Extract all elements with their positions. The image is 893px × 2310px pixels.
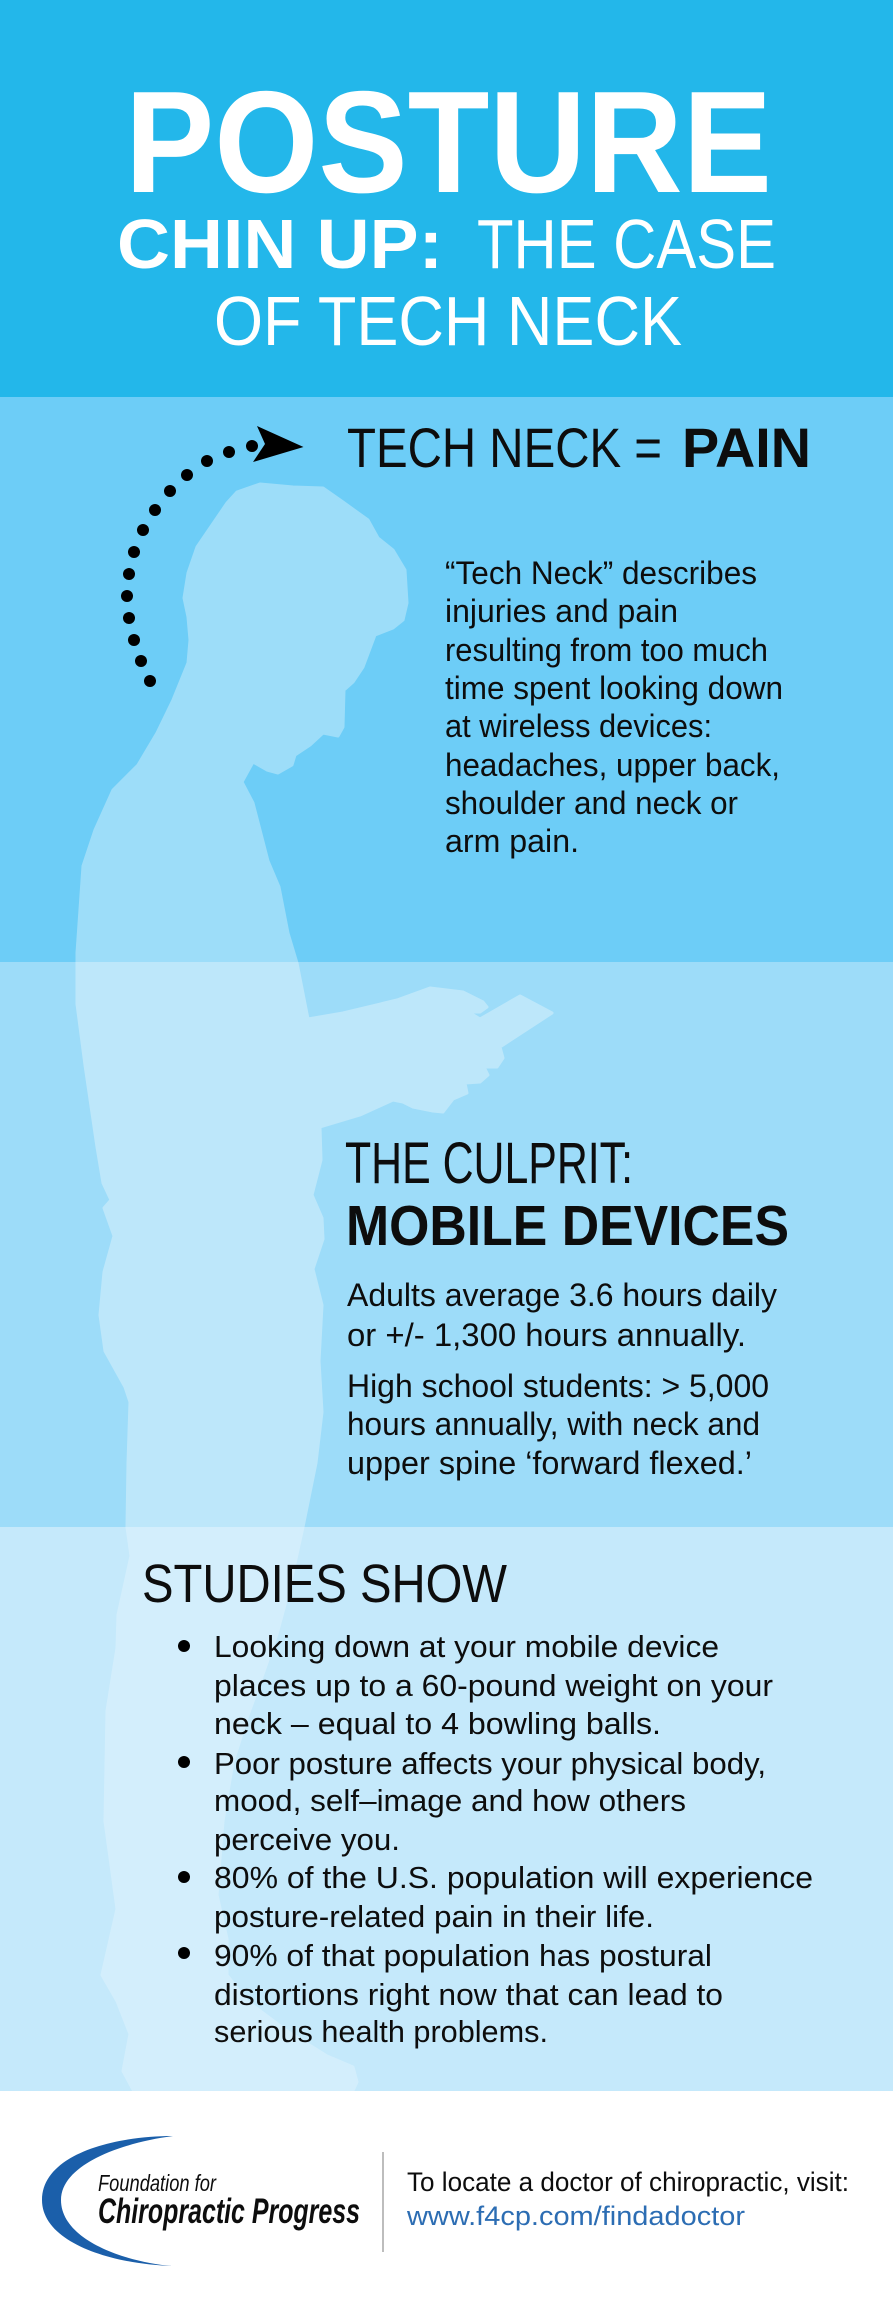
text block: tech neck description: at wireless devices: [445, 708, 712, 744]
logo: foundation for chiropractic progress: Foundation for [98, 2170, 217, 2196]
silhouette: person looking at phone [77, 484, 552, 2097]
text block: adult usage: or +/- 1,300 hours annually. [347, 1317, 746, 1353]
title: THE CASE [477, 205, 776, 283]
heading: tech neck = pain: PAIN [682, 416, 811, 479]
call to action: To locate a doctor of chiropractic, visit: [407, 2167, 849, 2197]
bullet 1: Looking down at your mobile device [214, 1629, 719, 1664]
list: study findings [178, 1629, 813, 2049]
bullet 1 [178, 1629, 773, 1741]
title [117, 61, 776, 360]
bullet 4: 90% of that population has postural [214, 1938, 712, 1973]
text block: tech neck description [445, 555, 783, 859]
title: OF TECH NECK [214, 282, 682, 360]
text block: tech neck description: headaches, upper back, [445, 747, 780, 783]
bullet 4 [178, 1938, 723, 2049]
heading: tech neck = pain: TECH NECK = [347, 416, 662, 479]
heading: the culprit [345, 1131, 789, 1258]
text block: tech neck description: shoulder and neck or [445, 785, 738, 821]
text block: student usage: upper spine ‘forward flexed.’ [347, 1445, 752, 1481]
panel: footer [0, 2091, 893, 2310]
bullet 2 [178, 1746, 766, 1857]
text block: tech neck description: arm pain. [445, 823, 579, 859]
panel: studies show [0, 1527, 893, 2091]
bullet 3: posture-related pain in their life. [214, 1899, 654, 1934]
call to action [406, 2167, 849, 2231]
arrow: dotted curve [121, 426, 304, 687]
text block: tech neck description: resulting from too much [445, 632, 768, 668]
panel: tech neck [0, 397, 893, 962]
text block: tech neck description: time spent looking down [445, 670, 783, 706]
panel: the culprit [0, 962, 893, 1527]
heading: the culprit: MOBILE DEVICES [346, 1194, 789, 1258]
text block: student usage: hours annually, with neck and [347, 1406, 760, 1442]
text block: tech neck description: “Tech Neck” describes [445, 555, 757, 591]
text block: student usage [347, 1368, 769, 1481]
bullet 2: mood, self–image and how others [214, 1783, 686, 1818]
panel: title header [0, 0, 893, 397]
bullet 3: 80% of the U.S. population will experience [214, 1860, 813, 1895]
title: POSTURE [125, 61, 772, 223]
bullet 3 [178, 1860, 813, 1934]
text block: adult usage [347, 1277, 777, 1353]
text block: student usage: High school students: > 5,000 [347, 1368, 769, 1404]
title: CHIN UP: [117, 205, 443, 283]
bullet 2: perceive you. [214, 1822, 400, 1857]
logo: foundation for chiropractic progress: Chiropractic Progress [98, 2192, 360, 2231]
logo: foundation for chiropractic progress [42, 2136, 360, 2266]
heading: studies show: STUDIES SHOW [142, 1554, 507, 1614]
bullet 4: serious health problems. [214, 2014, 548, 2049]
bullet 1: neck – equal to 4 bowling balls. [214, 1706, 661, 1741]
bullet 4: distortions right now that can lead to [214, 1977, 723, 2012]
text block: adult usage: Adults average 3.6 hours daily [347, 1277, 777, 1313]
bullet 2: Poor posture affects your physical body, [214, 1746, 766, 1781]
bullet 1: places up to a 60-pound weight on your [214, 1668, 773, 1703]
heading: the culprit: THE CULPRIT: [345, 1131, 633, 1196]
text block: tech neck description: injuries and pain [445, 593, 678, 629]
divider [382, 2152, 384, 2252]
call to action: www.f4cp.com/findadoctor [406, 2201, 745, 2231]
